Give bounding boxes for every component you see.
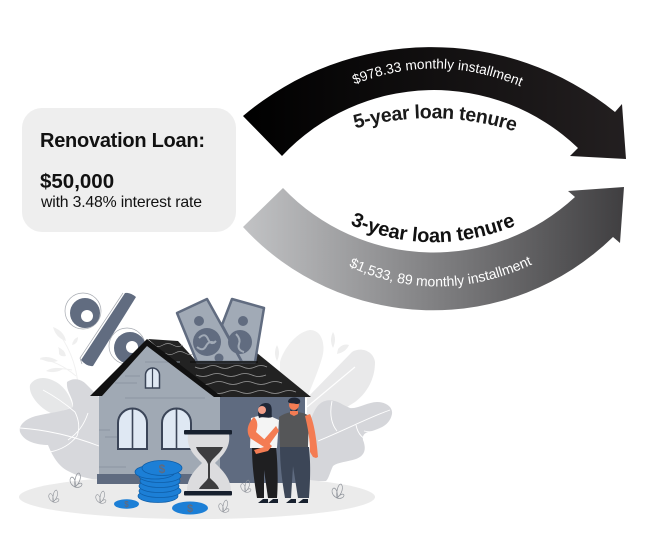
small window [146,368,160,388]
loan amount: $50,000 [40,170,114,193]
panel: loan summary [22,108,236,232]
monthly installment 3-year: $1,533, 89 monthly installment [350,256,532,288]
small coin left: $ [124,500,129,509]
right foliage [275,330,392,481]
arrow: 3-year tenure [243,187,624,310]
ground [19,475,375,519]
monthly installment 5-year: $978.33 monthly installment [352,58,523,86]
illustration: house and couple [19,293,392,519]
small coin right [172,502,208,515]
money bills [177,299,264,362]
couple [248,398,318,503]
house side wall [220,395,305,483]
large window right [162,408,191,449]
house roof [148,339,311,397]
gable trim [90,339,222,397]
coin stack [135,460,182,502]
house front wall [90,339,222,484]
coin dollar mark: $ [159,462,166,476]
sprouts [49,473,344,512]
percent sign [65,293,146,366]
hourglass [184,430,232,496]
base strip [97,474,220,484]
man [279,398,318,503]
arrow: 5-year tenure [243,47,626,159]
label: 3-year loan tenure: 3-year loan tenure [352,213,514,242]
small coin right: $ [187,503,193,515]
small coin left [114,499,139,509]
label: 5-year loan tenure: 5-year loan tenure [353,104,516,130]
interest rate: with 3.48% interest rate [40,194,202,211]
left foliage [20,327,100,480]
large window left [118,408,147,449]
woman [248,403,279,503]
heading: renovation loan: Renovation Loan: [40,130,205,152]
